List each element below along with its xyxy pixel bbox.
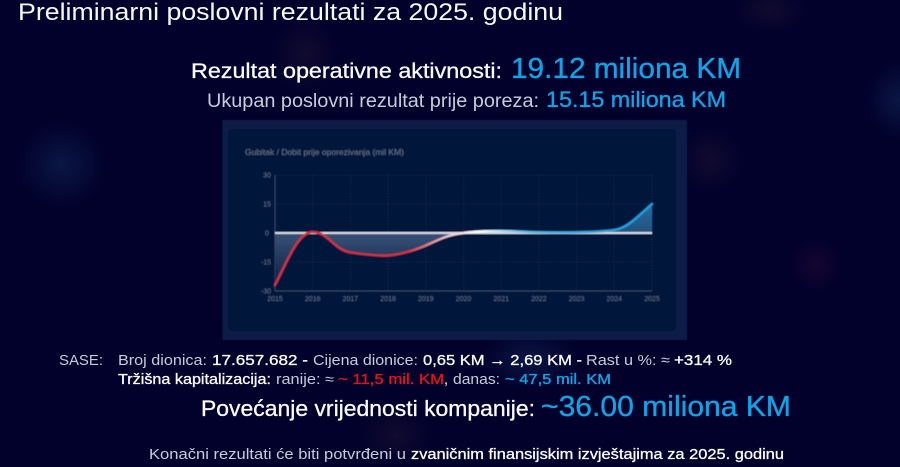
market capitalisation: ~ 47,5 mil. KM: [505, 372, 611, 388]
market capitalisation: ranije: ≈: [276, 372, 334, 388]
SASE share data: Cijena dionice:: [313, 352, 418, 369]
area fill: profit: [600, 204, 652, 233]
x axis labels: 2022: [531, 296, 547, 303]
SASE share data: Broj dionica:: [118, 352, 207, 369]
chart grid: [275, 175, 652, 291]
company value increase: Povećanje vrijednosti kompanije:: [201, 396, 535, 421]
SASE share data: 17.657.682 -: [212, 352, 308, 369]
x axis labels: [267, 296, 660, 303]
SASE share data: SASE:: [59, 352, 103, 369]
panel: chart: [222, 120, 687, 340]
zero line: [275, 232, 652, 234]
company value increase: [201, 391, 791, 423]
market capitalisation: Tržišna kapitalizacija:: [118, 372, 271, 388]
market capitalisation: ~ 11,5 mil. KM: [338, 372, 444, 388]
x axis labels: 2018: [380, 296, 396, 303]
y axis labels: 30: [263, 172, 271, 180]
y axis labels: [261, 172, 271, 296]
market capitalisation: ,: [444, 372, 448, 388]
area fill: loss: [275, 232, 464, 285]
pre-tax result headline: Ukupan poslovni rezultat prije poreza:: [207, 91, 539, 112]
x axis labels: 2019: [418, 296, 434, 303]
x axis labels: 2025: [644, 296, 660, 303]
chart title: Gubitak / Dobit prije oporezivanja (mil KM): [245, 148, 404, 157]
pre-tax result headline: 15.15 miliona KM: [546, 87, 726, 112]
operating result headline: 19.12 miliona KM: [511, 53, 741, 85]
x axis labels: 2024: [607, 296, 622, 303]
footnote: zvaničnim finansijskim izvještajima za 2025. godinu: [411, 446, 784, 463]
operating result headline: Rezultat operativne aktivnosti:: [191, 59, 502, 83]
operating result headline: [191, 53, 741, 85]
profit line: [275, 204, 652, 285]
SASE share data: 0,65 KM → 2,69 KM -: [423, 352, 582, 369]
footnote: [149, 446, 784, 463]
SASE share data: +314 %: [674, 352, 732, 369]
market capitalisation: [118, 372, 611, 388]
x axis labels: 2023: [569, 296, 584, 303]
x axis labels: 2017: [343, 296, 358, 303]
x axis labels: 2015: [267, 296, 283, 303]
company value increase: ~36.00 miliona KM: [541, 391, 791, 423]
x axis labels: 2021: [493, 296, 509, 303]
y axis labels: 15: [263, 202, 271, 208]
SASE share data: [59, 352, 732, 369]
x axis labels: 2016: [305, 296, 321, 303]
y axis labels: -15: [261, 260, 271, 266]
y axis labels: 0: [265, 230, 269, 238]
pre-tax result headline: [207, 87, 726, 112]
footnote: Konačni rezultati će biti potvrđeni u: [149, 446, 406, 463]
SASE share data: Rast u %: ≈: [586, 352, 670, 369]
y axis labels: -30: [261, 288, 271, 296]
market capitalisation: danas:: [453, 372, 500, 388]
x axis labels: 2020: [456, 296, 471, 303]
